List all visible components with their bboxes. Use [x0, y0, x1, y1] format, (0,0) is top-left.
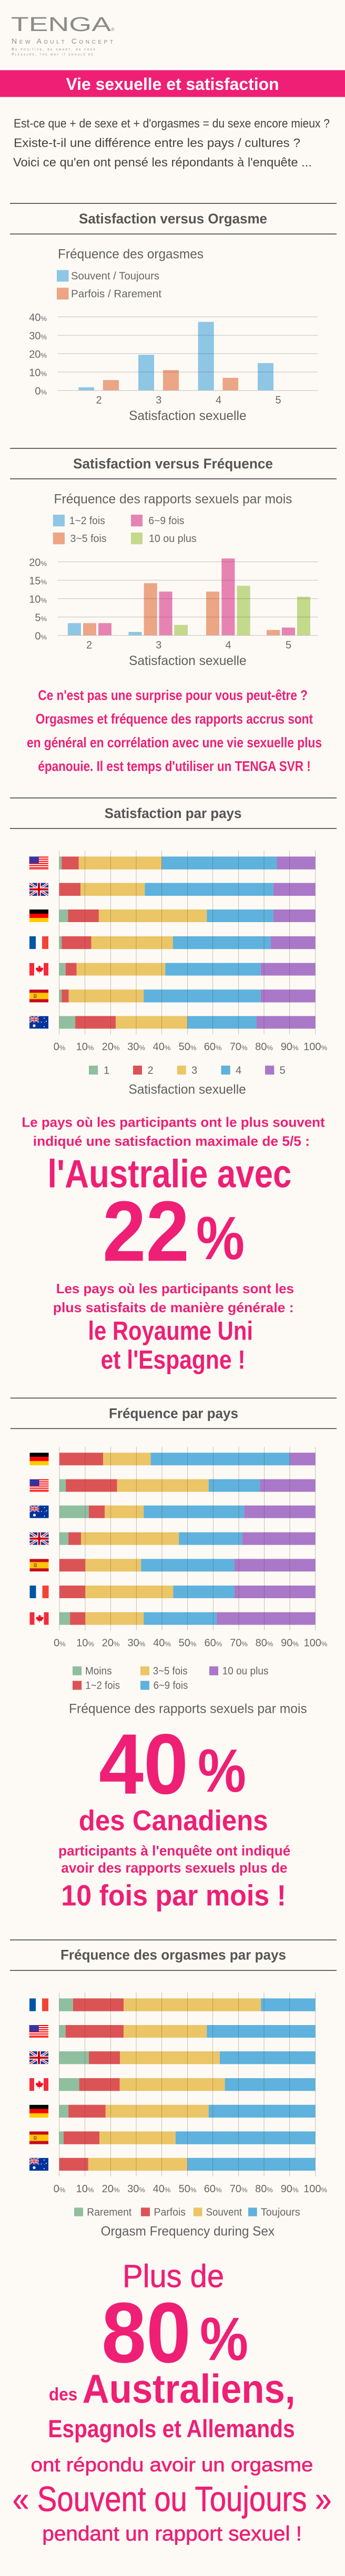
legend: 2: [147, 1065, 154, 1076]
legend: [89, 1065, 286, 1076]
heading: Fréquence des orgasmes par pays: Fréquence des orgasmes par pays: [60, 1947, 286, 1963]
callout: Australie 22%: %: [196, 1204, 245, 1272]
y axis: 0%: [35, 631, 47, 642]
x axis: 3: [156, 639, 161, 651]
x axis: 10%: [76, 1637, 94, 1649]
legend: 3~5 fois: [70, 533, 106, 545]
x axis: 50%: [179, 1041, 197, 1053]
axis title: Satisfaction sexuelle: [128, 1082, 246, 1097]
x axis: 30%: [127, 1637, 146, 1649]
axis title: Orgasm Frequency during Sex: [101, 2224, 275, 2238]
x axis: 90%: [281, 1041, 299, 1053]
legend: [74, 2206, 300, 2218]
y axis: 30%: [29, 330, 47, 342]
legend: Parfois: [154, 2206, 186, 2218]
x axis: 40%: [153, 2183, 171, 2195]
x axis: 0%: [54, 1637, 66, 1649]
chart: satisfaction versus frequence: [29, 492, 318, 668]
legend: 6~9 fois: [154, 1680, 188, 1692]
callout: Royaume Uni et Espagne: et l'Espagne !: [101, 1345, 245, 1374]
title banner: Vie sexuelle et satisfaction: [66, 75, 279, 94]
x axis: Satisfaction sexuelle: [129, 408, 247, 423]
callout: plus de 80%: [13, 2258, 332, 2546]
heading: Satisfaction versus Fréquence: Satisfaction versus Fréquence: [73, 456, 273, 472]
x axis: 5: [275, 395, 281, 406]
logo: TENGA: [11, 14, 115, 57]
callout: Australie 22%: 22: [103, 1183, 189, 1279]
callout: Australie 22%: [22, 1114, 325, 1279]
x axis: [54, 1992, 328, 2195]
x axis: 60%: [204, 2183, 222, 2195]
x axis: [54, 1447, 328, 1649]
legend: 3: [191, 1065, 197, 1076]
legend: [57, 270, 161, 300]
callout: plus de 80%: des: [49, 2385, 77, 2405]
callout: plus de 80%: Australiens,: [82, 2367, 296, 2412]
y axis: 0%: [35, 386, 47, 397]
legend: 1~2 fois: [85, 1680, 120, 1692]
x axis: 40%: [153, 1637, 171, 1649]
logo: TENGA: TENGA: [11, 14, 111, 36]
x axis: 30%: [127, 1041, 145, 1053]
stacked bars: [59, 1998, 316, 2171]
callout: Australie 22%: Le pays où les participants ont le plus souvent: [22, 1114, 325, 1130]
logo: TENGA: Be positive, be smart, be free: [12, 48, 96, 52]
legend: Moins: [85, 1665, 112, 1677]
x axis: 20%: [102, 2183, 120, 2195]
callout: 40% des Canadiens: 10 fois par mois !: [61, 1878, 286, 1911]
stacked bars: [59, 856, 316, 1029]
callout: 40% des Canadiens: [58, 1716, 290, 1911]
y axis: [29, 557, 318, 642]
chart: satisfaction par pays: [29, 851, 328, 1097]
legend: [73, 1665, 268, 1692]
x axis: 70%: [230, 2183, 248, 2195]
legend: 1~2 fois: [69, 515, 105, 527]
callout: plus de 80%: %: [200, 2305, 248, 2373]
x axis: 80%: [256, 1637, 273, 1649]
x axis: 4: [216, 395, 221, 406]
legend: 4: [236, 1065, 241, 1076]
callout: 40% des Canadiens: participants à l'enquête ont indiqué: [58, 1843, 290, 1858]
logo: TENGA: ®: [111, 27, 115, 32]
bars: [68, 558, 310, 635]
flags: [29, 1998, 48, 2171]
intro text: Existe-t-il une différence entre les pays / cultures ?: [14, 136, 300, 149]
x axis: 50%: [179, 1637, 197, 1649]
legend: Toujours: [261, 2206, 300, 2218]
callout: plus de 80%: ont répondu avoir un orgasme: [31, 2454, 313, 2476]
x axis: 2: [96, 395, 102, 406]
chart: frequence des orgasmes par pays: [29, 1992, 328, 2238]
x axis: 2: [86, 639, 92, 651]
logo: TENGA: Pleasure, the way it should be: [12, 53, 94, 57]
chart: satisfaction versus orgasme: [29, 247, 318, 423]
legend: Rarement: [87, 2206, 132, 2218]
chart title: Fréquence des rapports sexuels par mois: [54, 492, 292, 507]
x axis: 20%: [102, 1637, 120, 1649]
x axis: 90%: [281, 2183, 299, 2195]
y axis: [29, 312, 318, 397]
x axis: Satisfaction sexuelle: [129, 653, 247, 668]
x axis: 20%: [102, 1041, 120, 1053]
intro text: Voici ce qu'en ont pensé les répondants à l'enquête ...: [13, 156, 312, 169]
y axis: 10%: [29, 367, 47, 379]
chart: frequence par pays: [29, 1447, 328, 1716]
callout: plus de 80%: Espagnols et Allemands: [48, 2415, 295, 2442]
x axis: [54, 851, 328, 1053]
callout: 40% des Canadiens: %: [198, 1736, 246, 1805]
legend: 6~9 fois: [148, 515, 184, 527]
legend: [53, 515, 197, 545]
y axis: 20%: [29, 557, 47, 569]
callout: Australie 22%: l'Australie avec: [47, 1151, 291, 1195]
heading: Satisfaction par pays: Satisfaction par pays: [105, 805, 241, 821]
x axis: 0%: [54, 1041, 66, 1053]
callout: Royaume Uni et Espagne: plus satisfaits de manière générale :: [53, 1300, 294, 1315]
legend: Souvent / Toujours: [71, 271, 159, 282]
x axis: 5: [286, 639, 291, 651]
y axis: 15%: [29, 575, 47, 587]
x axis: 50%: [179, 2183, 197, 2195]
legend: 1: [104, 1065, 109, 1076]
flags: [29, 856, 48, 1029]
x axis: 3: [156, 395, 161, 406]
legend: 5: [279, 1065, 286, 1076]
x axis: 60%: [204, 1637, 222, 1649]
x axis: 100%: [304, 1637, 328, 1649]
heading: Fréquence par pays: Fréquence par pays: [109, 1406, 238, 1422]
callout: Australie 22%: indiqué une satisfaction maximale de 5/5 :: [33, 1133, 310, 1149]
x axis: 80%: [255, 1041, 273, 1053]
x axis: 70%: [230, 1041, 248, 1053]
callout: Royaume Uni et Espagne: le Royaume Uni: [88, 1316, 253, 1345]
x axis: 4: [225, 639, 231, 651]
stacked bars: [59, 1453, 316, 1625]
x axis: 60%: [204, 1041, 222, 1053]
callout: plus de 80%: pendant un rapport sexuel !: [42, 2523, 302, 2546]
x axis: 0%: [54, 2183, 66, 2195]
x axis: 80%: [255, 2183, 273, 2195]
callout: 40% des Canadiens: avoir des rapports sexuels plus de: [61, 1860, 287, 1876]
x axis: 100%: [303, 2183, 328, 2195]
y axis: 10%: [29, 594, 47, 606]
axis title: Fréquence des rapports sexuels par mois: [69, 1701, 307, 1716]
intro text: [13, 117, 330, 169]
x axis: 90%: [281, 1637, 299, 1649]
legend: 10 ou plus: [222, 1665, 268, 1677]
callout: plus de 80%: Plus de: [123, 2258, 224, 2294]
callout: Royaume Uni et Espagne: [53, 1281, 294, 1374]
title banner: [0, 70, 345, 97]
x axis: 10%: [76, 2183, 94, 2195]
legend: 10 ou plus: [149, 533, 197, 545]
x axis: 10%: [76, 1041, 94, 1053]
chart title: Fréquence des orgasmes: [58, 247, 204, 262]
y axis: 5%: [35, 612, 47, 623]
x axis: 70%: [230, 1637, 248, 1649]
callout: plus de 80%: 80: [102, 2284, 191, 2380]
x axis: [86, 639, 291, 668]
y axis: 40%: [29, 312, 47, 324]
heading: Satisfaction versus Orgasme: Satisfaction versus Orgasme: [79, 211, 267, 227]
x axis: [96, 395, 281, 423]
logo: TENGA: New Adult Concept: [12, 37, 113, 45]
callout: 40% des Canadiens: 40: [99, 1716, 188, 1812]
x axis: 40%: [153, 1041, 171, 1053]
bars: [78, 322, 273, 390]
legend: Parfois / Rarement: [71, 289, 161, 300]
x axis: 30%: [127, 2183, 145, 2195]
x axis: 100%: [303, 1041, 328, 1053]
y axis: 20%: [29, 349, 47, 361]
flags: [29, 1453, 48, 1625]
callout: Royaume Uni et Espagne: Les pays où les participants sont les: [56, 1281, 294, 1296]
callout: correlation: [27, 688, 322, 774]
legend: 3~5 fois: [153, 1665, 187, 1677]
callout: 40% des Canadiens: des Canadiens: [79, 1804, 268, 1837]
legend: Souvent: [206, 2206, 242, 2218]
